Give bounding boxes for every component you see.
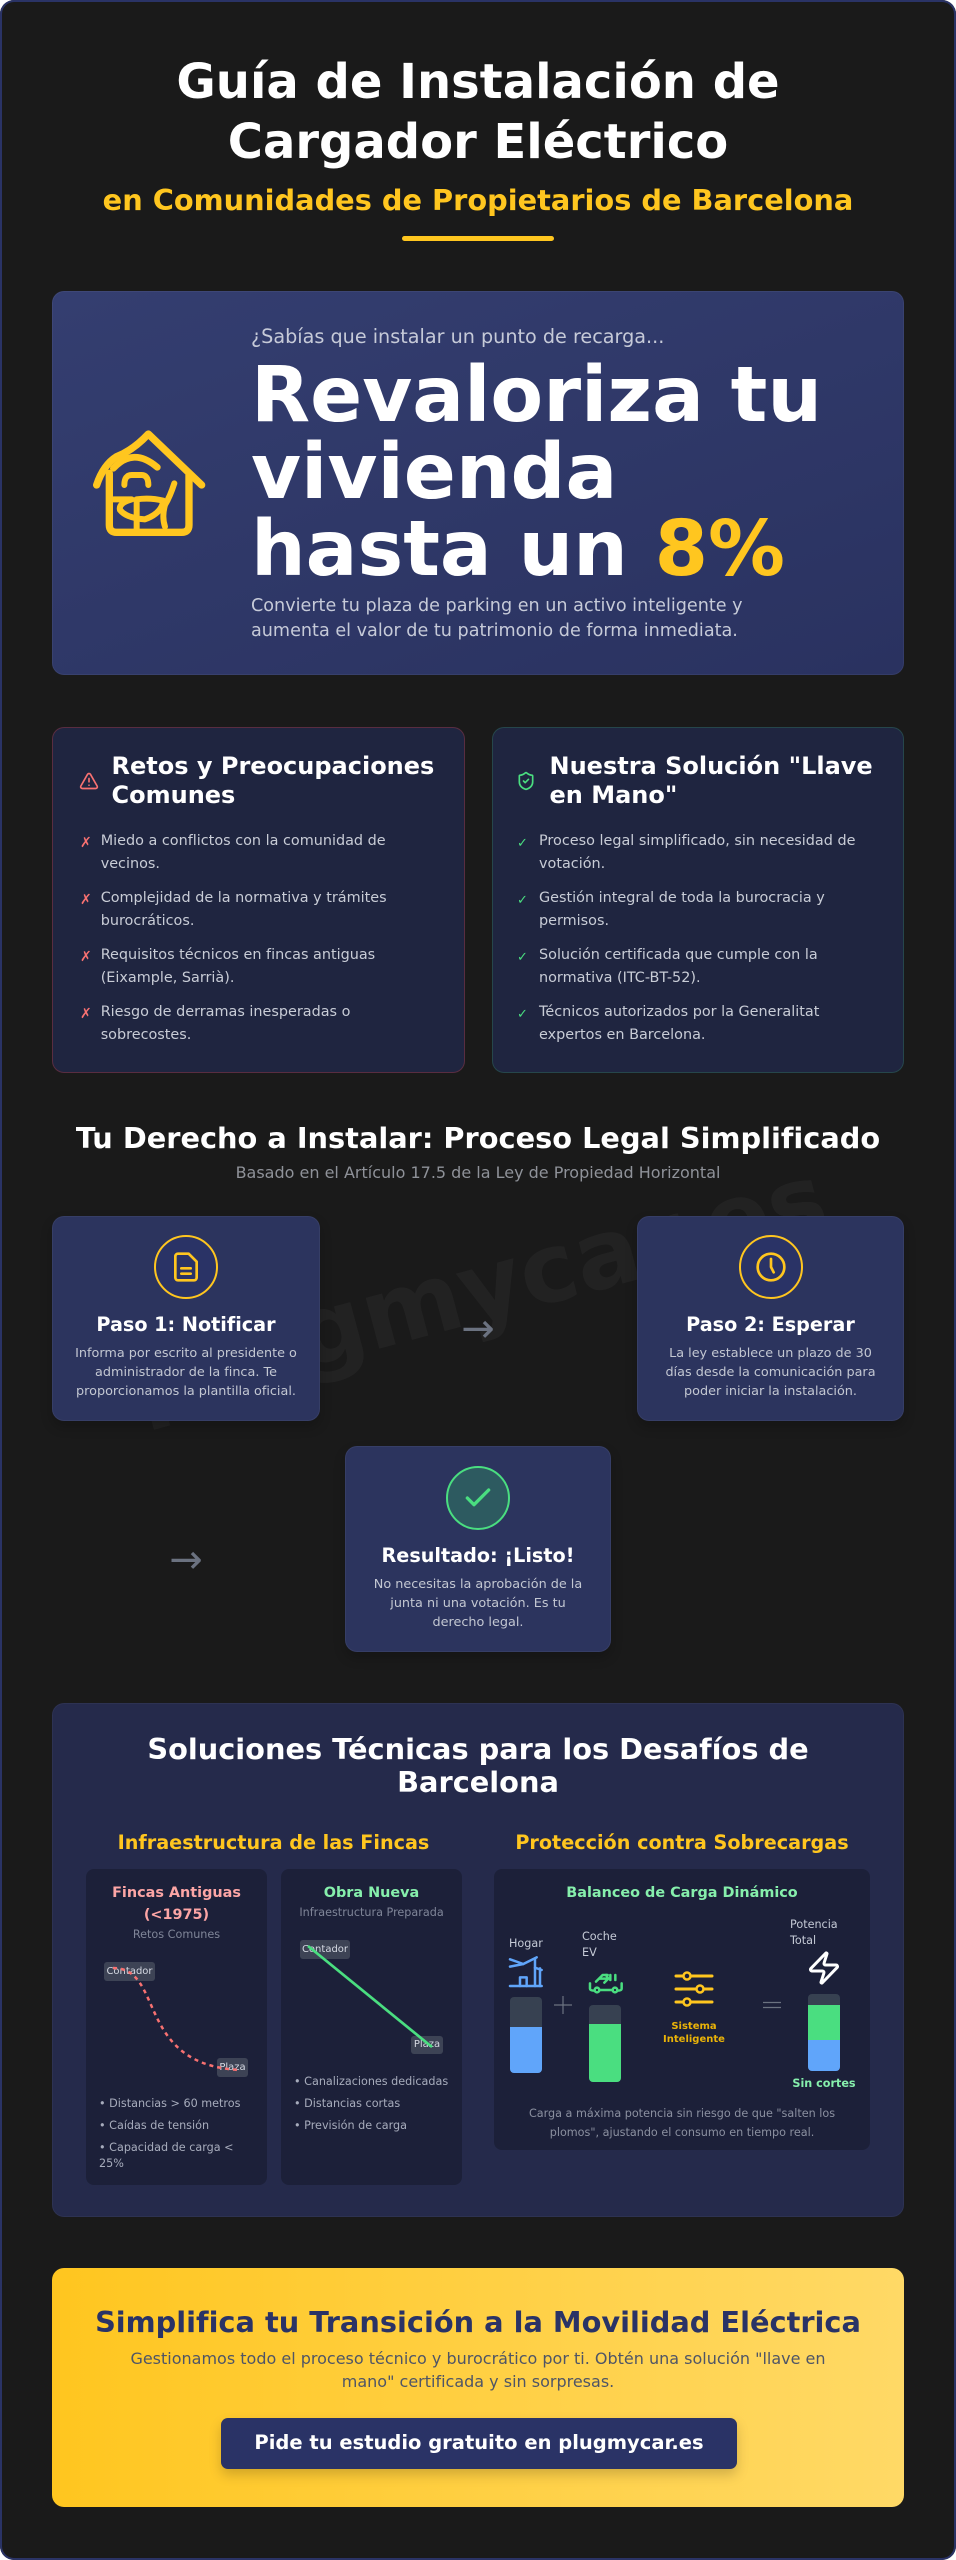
label: meter [104, 1962, 155, 1981]
heading: Retos y Preocupaciones [112, 752, 434, 780]
item 2: Gestión integral de toda la burocracia y [539, 890, 825, 906]
accent divider [402, 236, 554, 241]
item 2: ✓ [517, 893, 528, 908]
label: smart system [663, 2021, 725, 2045]
icon: warning triangle [80, 772, 98, 790]
heading: Nuestra Solución "Llave [550, 752, 873, 780]
heading: Comunes [112, 781, 235, 809]
arrow: step 2 to result: → [169, 1537, 203, 1583]
panel: solution [492, 727, 904, 1073]
item 4: Riesgo de derramas inesperadas o [101, 1004, 350, 1020]
item 2 [517, 890, 825, 929]
item 1: vecinos. [101, 856, 160, 872]
panel: result [345, 1446, 611, 1652]
item 4: ✓ [517, 1007, 528, 1022]
icon: clock [738, 1235, 802, 1299]
label: parking space: Plaza [219, 2062, 246, 2073]
step title: Paso 2: Esperar [686, 1313, 855, 1336]
panel: hero revalue statistic [52, 291, 904, 675]
result text: No necesitas la aprobación de la [374, 1577, 582, 1592]
panel: call to action [52, 2268, 904, 2507]
item 1: ✓ [517, 836, 528, 850]
result text: derecho legal. [433, 1615, 523, 1630]
heading [112, 752, 434, 809]
big statement: hasta un 8% [251, 505, 785, 594]
item 2 [80, 890, 387, 929]
label: parking space [217, 2058, 248, 2077]
heading: en Mano" [550, 781, 677, 809]
cta text [130, 2349, 826, 2391]
item 4: ✗ [80, 1006, 92, 1022]
icon: check [446, 1466, 510, 1530]
diagram: long dashed route [113, 1966, 237, 2072]
panel: step 1 [52, 1216, 320, 1421]
panel: technical solutions [52, 1703, 904, 2217]
explanation: plomos", ajustando el consumo en tiempo real. [550, 2126, 814, 2138]
item 2: Complejidad de la normativa y trámites [101, 890, 387, 906]
bar: home load [510, 1997, 542, 2073]
label: meter [300, 1940, 350, 1959]
panel: dynamic load balancing [494, 1869, 870, 2150]
item 4: expertos en Barcelona. [539, 1027, 705, 1043]
panel heading: Soluciones Técnicas para los Desafíos de [147, 1732, 809, 1766]
result text [374, 1577, 582, 1630]
label: total power [790, 1918, 838, 1947]
title: (<1975) [144, 1907, 209, 1923]
cta button: Pide tu estudio gratuito en plugmycar.es [254, 2431, 704, 2454]
item 3: Solución certificada que cumple con la [539, 947, 818, 963]
label: total power: Potencia [790, 1918, 838, 1931]
label: parking space: Plaza [414, 2039, 440, 2050]
bar: car load [589, 2005, 621, 2082]
item 4: sobrecostes. [101, 1027, 191, 1043]
item 1: ✗ [80, 834, 92, 850]
panel heading: Barcelona [397, 1765, 559, 1799]
watermark: plugmycar.es [118, 1141, 838, 1435]
cta text: Gestionamos todo el proceso técnico y burocrático por ti. Obtén una solución "llave en [130, 2349, 826, 2368]
result text: junta ni una votación. Es tu [390, 1596, 566, 1611]
header: title and subtitle [103, 54, 853, 241]
section heading: legal process: Tu Derecho a Instalar: Proceso Legal Simplificado [76, 1121, 880, 1155]
item 2: ✗ [80, 892, 92, 908]
subtitle: en Comunidades de Propietarios de Barcelona [103, 183, 853, 217]
item 2: permisos. [539, 913, 609, 929]
explanation: Carga a máxima potencia sin riesgo de que "salten los [529, 2106, 835, 2120]
step title: Paso 1: Notificar [96, 1313, 276, 1336]
list: • Canalizaciones dedicadas [294, 2075, 448, 2088]
item 3: (Eixample, Sarrià). [101, 970, 234, 986]
item 2: burocráticos. [101, 913, 194, 929]
list: • Distancias cortas [294, 2097, 400, 2110]
cta heading: Simplifica tu Transición a la Movilidad Eléctrica [95, 2305, 861, 2339]
step text [665, 1346, 876, 1399]
subtitle: Retos Comunes [133, 1928, 220, 1941]
subheading: overload: Protección contra Sobrecargas [515, 1831, 849, 1854]
big statement: Revaloriza tu [251, 351, 822, 440]
icon: house [93, 430, 206, 536]
step text: administrador de la finca. Te [95, 1365, 277, 1380]
title: Guía de Instalación de [176, 54, 780, 110]
subheading: infrastructure: Infraestructura de las Fincas [118, 1831, 429, 1854]
item 1 [517, 832, 855, 872]
hero caption [251, 596, 743, 641]
icon: smart system sliders [674, 1971, 714, 2007]
item 3: Requisitos técnicos en fincas antiguas [101, 947, 375, 963]
item 1 [80, 832, 386, 872]
step text: La ley establece un plazo de 30 [669, 1346, 872, 1361]
big statement [251, 351, 822, 594]
list: 25% [99, 2157, 124, 2170]
item 3 [80, 947, 375, 986]
item 1: Proceso legal simplificado, sin necesidad de [539, 832, 855, 848]
item 3: normativa (ITC-BT-52). [539, 970, 701, 986]
step text: días desde la comunicación para [665, 1365, 876, 1380]
icon: document [154, 1235, 218, 1299]
step text: poder iniciar la instalación. [684, 1384, 857, 1399]
item 4: Técnicos autorizados por la Generalitat [539, 1004, 819, 1020]
label: car [582, 1930, 617, 1959]
list [99, 2141, 234, 2170]
label: parking space [411, 2036, 443, 2054]
panel: new construction [281, 1869, 462, 2185]
item 4 [517, 1004, 820, 1043]
hero caption: Convierte tu plaza de parking en un activo inteligente y [251, 596, 743, 616]
section subheading: Basado en el Artículo 17.5 de la Ley de Propiedad Horizontal [236, 1163, 720, 1182]
intro text: ¿Sabías que instalar un punto de recarga... [251, 325, 664, 348]
big statement: vivienda [251, 428, 617, 517]
explanation [529, 2106, 835, 2138]
step text [75, 1346, 297, 1399]
diagram: short direct route [307, 1945, 433, 2048]
label: no outages: Sin cortes [792, 2077, 856, 2090]
item 3 [517, 947, 818, 986]
title: Obra Nueva [324, 1885, 419, 1901]
arrow: step 1 to step 2: → [461, 1306, 495, 1352]
item 3: ✗ [80, 949, 92, 965]
hero caption: aumenta el valor de tu patrimonio de forma inmediata. [251, 621, 738, 641]
label: smart system: Sistema [671, 2021, 717, 2032]
list: • Previsión de carga [294, 2119, 407, 2132]
icon: home power [508, 1956, 543, 1988]
title: Cargador Eléctrico [228, 114, 728, 170]
heading [550, 752, 873, 809]
step text: proporcionamos la plantilla oficial. [76, 1384, 296, 1399]
label: meter: Contador [106, 1966, 153, 1977]
title: Balanceo de Carga Dinámico [566, 1885, 798, 1901]
item 1: Miedo a conflictos con la comunidad de [101, 832, 386, 848]
title [176, 54, 780, 170]
panel: step 2 [637, 1216, 904, 1421]
list: • Caídas de tensión [99, 2119, 209, 2132]
label: car: Coche [582, 1930, 617, 1943]
item 3: ✓ [517, 950, 528, 965]
panel: old buildings [86, 1869, 267, 2185]
cta text: mano" certificada y sin sorpresas. [342, 2372, 614, 2391]
label: total power: Total [790, 1934, 816, 1947]
panel heading [147, 1732, 809, 1799]
label: car: EV [582, 1946, 597, 1959]
plus sign [554, 1996, 572, 2014]
icon: car charging [588, 1974, 623, 1994]
equals sign [763, 2002, 781, 2008]
subtitle: Infraestructura Preparada [299, 1906, 444, 1919]
item 4 [80, 1004, 350, 1043]
icon: shield check [518, 772, 534, 790]
label: home: Hogar [509, 1937, 543, 1950]
list: • Capacidad de carga < [99, 2141, 234, 2154]
title: Fincas Antiguas [112, 1885, 241, 1901]
list: • Distancias > 60 metros [99, 2097, 240, 2110]
label: smart system: Inteligente [663, 2034, 725, 2045]
panel: challenges [52, 727, 465, 1073]
label: meter: Contador [302, 1944, 348, 1955]
icon: lightning bolt [809, 1951, 839, 1985]
bar: total power [808, 1994, 840, 2071]
cta button [221, 2418, 737, 2469]
result title: Resultado: ¡Listo! [382, 1544, 574, 1567]
title [112, 1885, 241, 1923]
item 1: votación. [539, 856, 605, 872]
step text: Informa por escrito al presidente o [75, 1346, 297, 1361]
